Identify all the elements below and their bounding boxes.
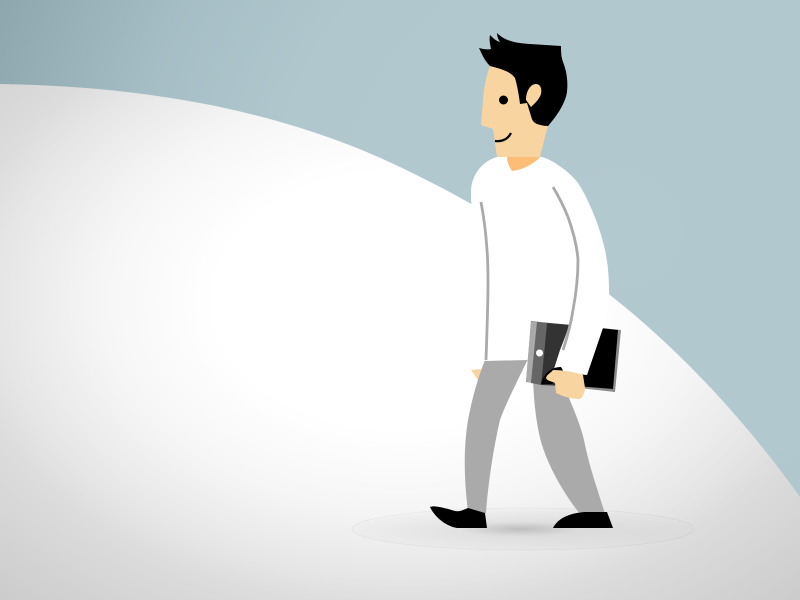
shirt sleeve — [553, 230, 609, 375]
tablet dark panel — [541, 323, 572, 386]
tablet black panel — [565, 325, 618, 389]
ear — [526, 84, 541, 107]
eye — [499, 96, 508, 104]
thumb shadow — [541, 367, 565, 384]
tablet button — [536, 350, 543, 356]
face — [481, 66, 548, 157]
front leg — [533, 372, 605, 514]
hair — [479, 33, 567, 126]
tablet light edge — [526, 322, 537, 383]
hand holding tablet — [541, 367, 585, 399]
back leg — [465, 359, 528, 513]
hand — [546, 370, 585, 399]
tablet — [526, 321, 621, 392]
tablet back edge — [526, 321, 621, 392]
ground shadow — [352, 508, 694, 550]
shirt fold: right — [553, 187, 578, 350]
shirt body — [471, 157, 609, 361]
smile — [495, 133, 511, 141]
front shoe — [553, 512, 613, 528]
head — [479, 33, 567, 157]
back shoe — [430, 506, 487, 528]
tablet spine — [531, 322, 547, 385]
figure: man — [430, 33, 621, 528]
back hand — [471, 369, 481, 383]
shirt fold: left — [481, 202, 488, 360]
neck collar — [507, 157, 540, 171]
